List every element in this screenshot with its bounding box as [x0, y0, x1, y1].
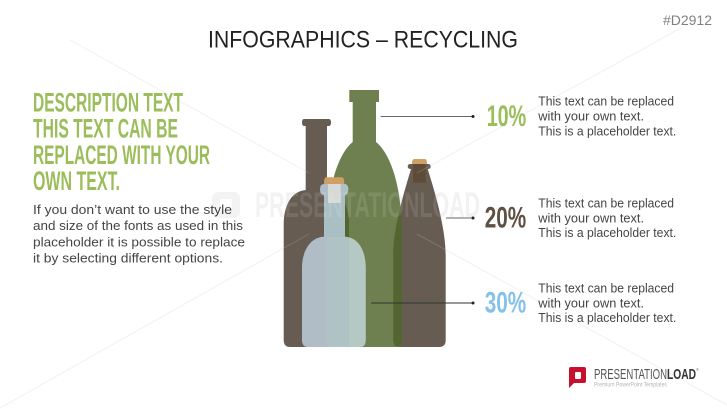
text block: 20%: This text can be replaced [538, 195, 674, 210]
bottle: left brown [284, 119, 349, 347]
text block: 30%: with your own text. [537, 295, 644, 310]
text block: 10%: This text can be replaced [538, 94, 674, 109]
leader line: 30% [371, 302, 474, 304]
text block: 10%: with your own text. [537, 109, 644, 124]
heading: description: DESCRIPTION TEXT [33, 88, 183, 118]
logo: PresentationLoad: Premium PowerPoint Templates [594, 382, 667, 388]
watermark: PRESENTATIONLOAD [255, 186, 480, 225]
text block: description body: placeholder it is possible to replace [33, 234, 245, 249]
logo: PresentationLoad: PRESENTATION [594, 366, 667, 383]
stat: 30%: 30% [485, 287, 526, 320]
heading: description: OWN TEXT. [33, 166, 120, 196]
stat: 20%: 20% [485, 202, 526, 235]
heading: description: THIS TEXT CAN BE [33, 114, 178, 144]
text block: description body: and size of the fonts as used in this [33, 218, 244, 233]
logo: PresentationLoad: LOAD [667, 366, 696, 383]
title: INFOGRAPHICS – RECYCLING [208, 27, 518, 54]
text block: description body: If you don’t want to use the style [33, 202, 232, 217]
text block: 30% [537, 280, 676, 325]
leader line: 20% [446, 216, 474, 220]
icon: red speech-bubble P [569, 367, 586, 388]
watermark overlay on bottles: PRESENTATIONLOAD [255, 186, 480, 225]
stat: 10%: 10% [487, 100, 526, 133]
text block: 20%: with your own text. [537, 210, 644, 225]
document id: #D2912 [663, 12, 712, 28]
chart: bottles [284, 90, 446, 349]
bottle: right brown with cork [393, 159, 446, 347]
text block: 30%: This is a placeholder text. [538, 310, 676, 325]
heading: description: REPLACED WITH YOUR [33, 140, 210, 170]
watermark [212, 186, 480, 225]
text block: 30%: This text can be replaced [538, 280, 674, 295]
leader line: 10% [381, 115, 474, 118]
bottle: light blue with cork [302, 177, 369, 349]
heading: description [33, 88, 210, 196]
text block: description body [33, 202, 245, 266]
text block: 10% [537, 94, 676, 138]
logo: PresentationLoad: ® [696, 367, 699, 372]
text block: description body: it by selecting different options. [33, 251, 223, 266]
text block: 20% [537, 195, 676, 240]
text block: 10%: This is a placeholder text. [538, 123, 676, 138]
bottle: green [327, 90, 402, 347]
text block: 20%: This is a placeholder text. [538, 225, 676, 240]
logo: PresentationLoad [569, 366, 699, 388]
diagonal lines over bottles [284, 157, 446, 250]
